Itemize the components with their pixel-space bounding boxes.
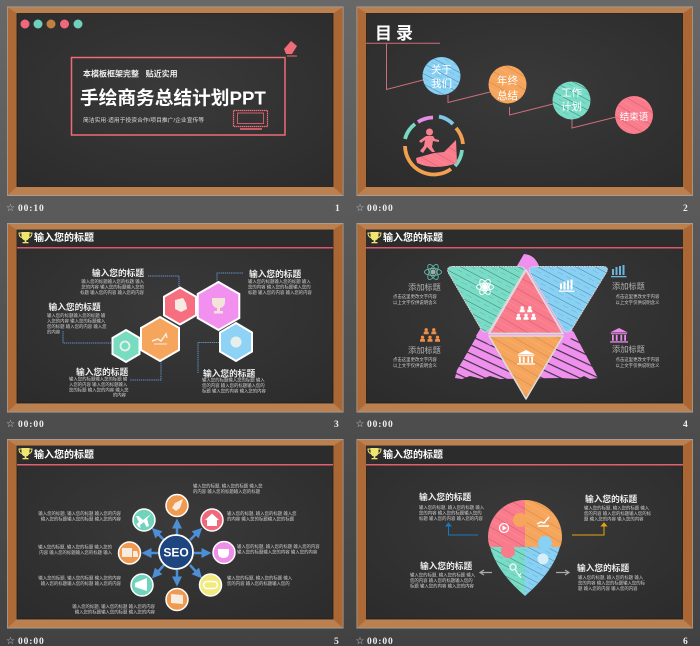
arrow: blue [446,523,478,535]
footer [6,419,340,430]
text: right 2 [237,543,320,556]
triangle: blue [529,266,607,332]
text block: bottom right: 输入您的标题 [203,368,255,378]
circle: about us: 我们 [431,77,452,90]
text block: top right: 输入您的标题 [249,268,301,279]
header [17,230,333,248]
text block: bottom left [410,560,476,590]
footer: ☆ [6,203,15,214]
hexagon: pink [164,288,196,324]
text: left 2: 内容 输入您的标题输入您的标题 输入 [39,549,113,556]
text: bottom: 输入您的标题, 输入您的标题 输入您的内容 [72,603,156,610]
header [366,230,683,248]
text: bottom [72,603,156,616]
text block: bottom right: 输入您的标题输入您的标题 输入 [202,376,265,384]
icon: rocket [166,494,188,516]
text block: bottom right [577,562,646,592]
header [366,446,683,466]
icon: cup [213,542,235,564]
text block: bottom right [612,344,660,369]
text: right 3: 输入您的标题, 输入您的标题 输入 [227,574,293,582]
icon: atom teal [424,263,442,281]
text block: top right: 题 输入您的内容 输入您的内容 [584,516,644,522]
icon: megaphone [131,574,153,596]
text block: left [47,301,107,336]
text block: top left: 以上文字仅供说明含义 [393,299,438,306]
circle: work plan: 工作 [561,87,582,99]
color dots [20,20,82,28]
icon: flag [166,588,188,610]
icon: ring with climbing figure [405,116,463,175]
text block: bottom right: 点击这里更改文字内容 [616,356,660,363]
text: right 2: 输入您的标题, 输入您的标题 输入您的内容 [237,543,320,550]
text: right 2: 输入您的标题输入您的内容 输入您的内容 [237,548,318,556]
circle: year end: 年终 [497,74,518,87]
text block: top right [612,281,660,306]
footer: 00:00 [367,420,394,430]
text: right 3: 您的内容 输入您的标题输入您的 [227,580,290,587]
text: top [193,482,263,495]
text block: top left [419,491,485,522]
icon: truck [118,542,140,564]
text: top: 输入您的标题, 输入您的标题 输入您 [193,482,263,490]
footer: 00:00 [18,420,45,430]
circle: about us: 关于 [431,63,452,76]
icon: atom white [476,278,494,296]
text: left 3: 输入您的标题, 输入您的标题 输入您的内容 [38,574,122,582]
text block: bottom left [393,345,441,369]
icon: people white [516,306,536,320]
panel: slide 4 star of triangles [356,223,693,430]
panel: slide 5 SEO hub [6,439,344,646]
text block: top left: 标题 输入您的内容 输入您的内容 [419,515,484,522]
text block: top right: 点击这里更改文字内容 [616,293,660,300]
header: 输入您的标题 [383,448,443,461]
text block: bottom left: 输入您的标题输入您的标题 输 [69,376,128,382]
text: right 1: 的内容 输入您的标题输入您的标题 [227,516,295,522]
text block: top right [248,268,313,296]
text block: top left: 您的内容 输入您的标题输入您的 [81,284,145,290]
triangle: violet scribble [455,254,598,379]
icon: pen [284,41,297,56]
text block: top right: 您的内容 输入您的标题输入您的标 [584,510,652,517]
text: bottom: 输入您的标题输入您的标题 输入您的内容 [75,608,156,616]
icon: bars blue [611,265,626,277]
text block: bottom left: 输入您的标题 [76,366,128,377]
arrow: left gray [480,570,492,575]
text block: bottom left: 输入您的标题 [420,560,472,571]
puzzle tabs [501,513,552,558]
text block: top right: 标题 输入您的内容 输入您的内容 [248,289,313,296]
SEO hub: SEO [163,546,189,560]
icon: gamepad [200,574,222,596]
icon: bank white [517,350,535,365]
arrows [146,523,207,582]
triangle: pink [489,270,563,334]
text block: top left [80,267,145,296]
text block: top right: 您的内容 输入您的标题输入您的 [248,284,311,290]
header [17,446,333,466]
panel: slide 3 hexagons [6,223,344,430]
footer: ☆ [356,203,364,214]
footer: 1 [335,204,341,214]
SEO hub [159,535,193,569]
footer [6,203,341,214]
text block: bottom right: 以上文字仅供说明含义 [616,362,660,369]
circle: work plan: 计划 [561,100,582,113]
text block: bottom left: 添加标题 [408,345,441,355]
text block: bottom right: 添加标题 [612,344,645,354]
pin: teal piece [490,547,525,596]
text block: top left: 点击这里更改文字内容 [393,293,438,300]
text block: top left: 输入您的标题 [92,267,144,278]
text: right 1 [227,510,297,522]
text: left 2 [38,544,113,556]
text block: bottom left: 您的标题 输入您的内容 输入您 [69,386,129,394]
text block: top right: 输入您的标题 [585,493,637,504]
text block: top left: 输入您的标题输入您的标题 输入 [81,278,145,285]
hexagon: orange [141,317,179,361]
circle: conclusion [615,96,653,134]
pin: pink piece [488,500,525,547]
icon: key [510,564,521,578]
text block: bottom left: 点击这里更改文字内容 [393,356,438,363]
header: 输入您的标题 [34,448,94,461]
text block: left: 的内容 [47,328,61,336]
icon: bars white [559,280,574,292]
text block: top left: 标题 输入您的内容 输入您的内容 [80,289,145,296]
text: left 3: 输入您的标题输入您的标题 输入您的内容 [41,580,122,587]
circle: conclusion: 结束语 [620,111,649,123]
arrow: gold [572,523,606,535]
text block: top right: 以上文字仅供说明含义 [616,299,660,306]
text block: bottom right [202,368,267,394]
text: left 1: 输入您的标题输入您的标题 输入您的内容 [41,516,122,522]
footer: 00:00 [367,204,394,214]
text block: bottom left: 标题 输入您的内容 输入您的内容 [410,582,475,590]
panel: slide 2 contents [356,6,693,214]
arrow: right gray [556,570,569,575]
text: top: 的内容 输入您的标题输入您的标题 [193,488,261,495]
circle: year end [488,66,526,104]
triangle: orange [489,336,563,399]
footer: 4 [683,420,689,430]
icon: bank violet [610,328,628,343]
pin: orange piece [525,500,562,547]
footer [356,203,689,214]
text block: top right [584,493,652,522]
footer: ☆ [6,419,15,430]
heading: 目录 [375,24,417,43]
text block: bottom left: 输入您的标题, 输入您的标题 输入 [410,572,476,578]
triangle: teal [448,266,524,332]
circle: year end: 总结 [497,89,518,102]
text: right 1: 输入您的标题, 输入您的标题 输入您 [227,510,297,517]
icon: chart [537,517,549,526]
icon: monitor [234,110,268,129]
text: left 1: 输入您的标题, 输入您的标题 输入您的内容 [38,510,122,517]
hexagon: violet [198,282,239,330]
footer [6,636,340,646]
text: right 3 [227,574,293,587]
hexagon: teal [112,330,140,362]
text block: bottom right: 您的内容 输入您的标题输入您的标 [578,580,646,586]
text block: left: 您的标题 输入您的内容 输入您 [47,323,107,330]
icon: people orange [420,328,440,342]
pin: blue piece [525,547,560,596]
text block: left: 输入您的标题输入您的标题 输 [47,312,106,319]
text block: bottom left: 您的内容 输入您的标题输入您的 [410,577,473,584]
footer [356,636,689,646]
text block: bottom right: 您的内容 输入您的标题输入您的 [202,382,265,389]
text block: top right: 输入您的标题输入您的标题 输入 [248,278,311,285]
panel: slide 1 cover [6,6,344,214]
footer: 2 [683,204,689,214]
text block: top left: 输入您的标题, 输入您的标题 输入 [419,504,485,511]
circle: about us [422,57,460,95]
footer: 00:10 [18,204,45,214]
text block: left: 输入您的标题 [48,301,101,312]
description: 简洁实用·适用于投资合作/项目推广/企业宣传等 [83,116,204,124]
footer: ☆ [356,419,364,430]
text block: top right: 添加标题 [612,281,645,291]
text block: top left [393,282,441,306]
icon: disc [538,554,548,564]
connectors [366,43,616,128]
text block: left: 入您的内容 输入您的标题输入 [47,318,106,324]
text block: bottom right: 题 输入您的内容 输入您的内容 [578,585,638,592]
footer [356,419,689,430]
text block: bottom left: 的内容 [113,392,127,398]
text block: top left: 添加标题 [408,282,441,292]
text block: bottom right: 输入您的标题, 输入您的标题 输入 [578,574,644,581]
text block: bottom left [69,366,129,398]
text block: bottom right: 输入您的标题 [577,562,629,573]
footer: 3 [334,420,340,430]
text block: top right: 输入您的标题, 输入您的标题 输入 [584,504,650,512]
text block: bottom right: 标题 输入您的内容 输入您的内容 [202,388,267,394]
text: left 1 [38,510,122,522]
text block: bottom left: 入您的内容 输入您的标题输入 [69,381,128,388]
main title: 手绘商务总结计划PPT [80,88,266,108]
icon: house [201,509,223,531]
circle: work plan [552,82,590,120]
header: 输入您的标题 [383,231,443,244]
panel: slide 6 puzzle pin [356,439,693,646]
title box [72,58,285,135]
text block: bottom left: 以上文字仅供说明含义 [393,362,438,369]
text: left 2: 输入您的标题, 输入您的标题 输入您的 [38,544,113,550]
icon: play [500,524,508,532]
icon: plane [133,509,155,531]
text: left 3 [38,574,122,587]
header: 输入您的标题 [34,231,94,244]
subtitle: 本模板框架完整 贴近实用 [83,68,178,78]
text block: top left: 输入您的标题 [419,491,471,502]
dotted connectors [63,273,243,380]
hexagon: blue [220,323,252,361]
text block: top left: 您的内容 输入您的标题输入您的 [419,510,482,516]
